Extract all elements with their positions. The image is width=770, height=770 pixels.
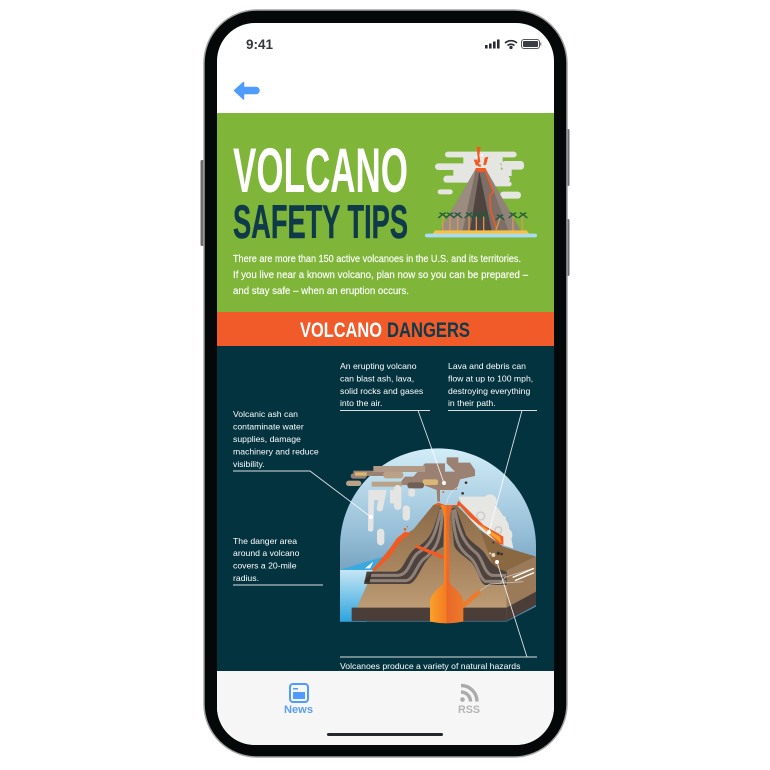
panel: volcano dangers	[217, 346, 554, 671]
callout: ash contaminates water: visibility.	[233, 459, 265, 469]
panel: green title banner	[217, 113, 554, 312]
callout: danger area: covers a 20-mile	[233, 560, 297, 570]
label: rss: RSS	[458, 704, 480, 716]
intro text: and stay safe – when an eruption occurs.	[233, 286, 409, 297]
status bar: 9:41	[246, 37, 273, 52]
panel: orange section header: VOLCANO	[300, 319, 382, 342]
ash drips	[368, 485, 415, 545]
rock layers	[364, 508, 444, 584]
intro text: There are more than 150 active volcanoes in the U.S. and its territories.	[233, 254, 521, 265]
callout: lava and debris	[448, 361, 537, 534]
callout: ash contaminates water: supplies, damage	[233, 434, 301, 444]
tab bar	[217, 671, 554, 745]
callout: danger area	[233, 536, 323, 585]
panel: orange section header: DANGERS	[387, 319, 470, 342]
icon: back arrow	[234, 82, 259, 99]
icon: signal bars	[485, 40, 500, 48]
callout: lava and debris: destroying everything	[448, 386, 530, 396]
land body	[352, 505, 507, 620]
icon: wifi	[505, 41, 517, 48]
callout: natural hazards: Volcanoes produce a variety of natural hazards	[340, 661, 521, 671]
intro text	[233, 254, 528, 297]
lava flows	[372, 501, 503, 571]
callout: ash contaminates water: machinery and reduce	[233, 446, 319, 456]
icon: battery	[522, 40, 541, 48]
icon: rss	[460, 686, 477, 702]
callout: erupting volcano: An erupting volcano	[340, 361, 417, 371]
panel: orange section header	[217, 312, 554, 346]
title: VOLCANO	[233, 136, 408, 206]
white ash cloud	[458, 494, 513, 548]
callout: erupting volcano: into the air.	[340, 398, 382, 408]
diagram: volcano cross-section	[340, 448, 536, 623]
callout: natural hazards	[340, 560, 537, 671]
home indicator	[327, 733, 443, 736]
icon: news	[290, 684, 308, 702]
callout: erupting volcano: solid rocks and gases	[340, 386, 424, 396]
callout: ash contaminates water: contaminate water	[233, 422, 304, 432]
callout: ash contaminates water	[233, 409, 373, 519]
subtitle: SAFETY TIPS	[233, 195, 408, 248]
callout: erupting volcano	[340, 361, 446, 485]
callout: danger area: The danger area	[233, 536, 297, 546]
callout: erupting volcano: can blast ash, lava,	[340, 374, 414, 384]
callout: ash contaminates water: Volcanic ash can	[233, 409, 298, 419]
callout: danger area: radius.	[233, 573, 259, 583]
callout: lava and debris: flow at up to 100 mph,	[448, 374, 533, 384]
label: news: News	[284, 704, 313, 716]
icon: small volcano	[425, 147, 537, 237]
ash plume	[351, 457, 475, 502]
callout: lava and debris: Lava and debris can	[448, 361, 526, 371]
phone frame	[200, 10, 570, 757]
callout: lava and debris: in their path.	[448, 398, 496, 408]
flying rocks	[461, 481, 503, 555]
status bar	[246, 39, 542, 50]
sea	[340, 556, 383, 622]
intro text: If you live near a known volcano, plan now so you can be prepared –	[233, 270, 528, 281]
callout: danger area: around a volcano	[233, 548, 300, 558]
magma conduit and chamber	[430, 505, 463, 623]
